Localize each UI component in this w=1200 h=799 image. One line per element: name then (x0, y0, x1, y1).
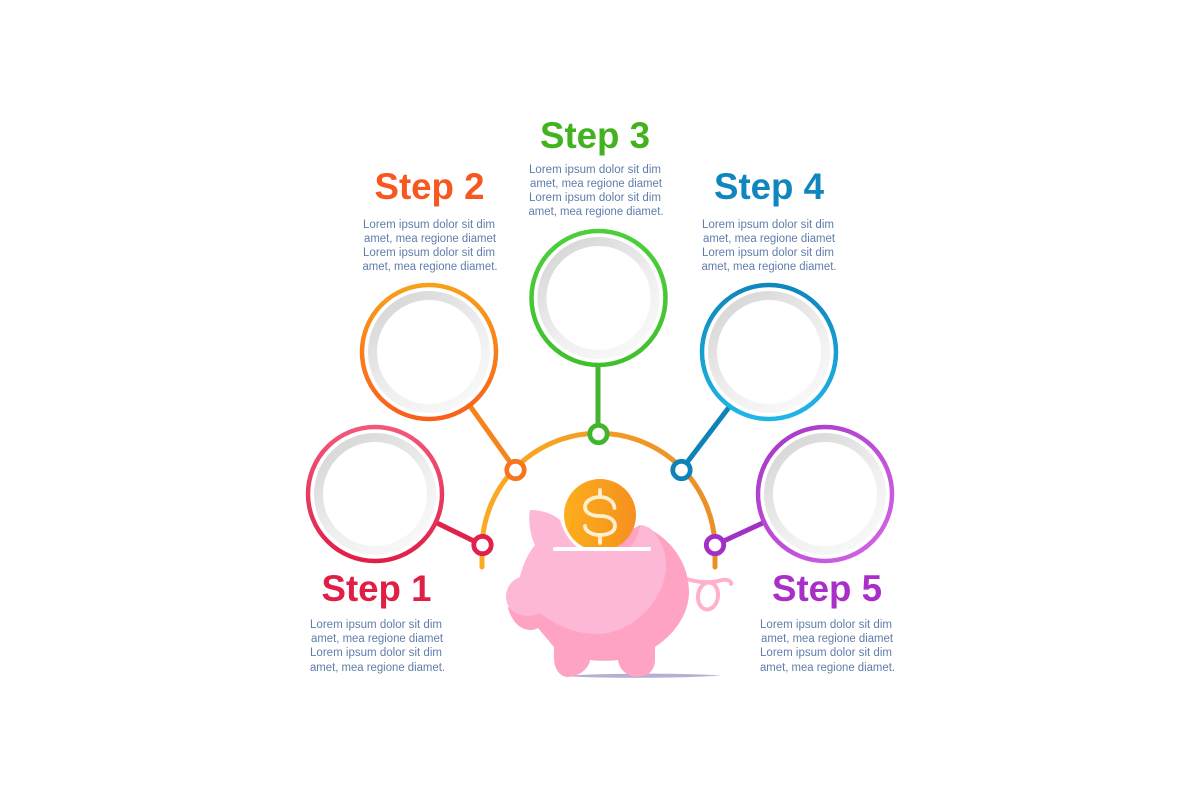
panel: step 1 (308, 427, 491, 674)
text block: step 3: Lorem ipsum dolor sit dim (529, 164, 661, 176)
text block: step 3: amet, mea regione diamet. (528, 206, 664, 218)
connector arc (482, 433, 715, 567)
connector: step 2 (470, 406, 524, 479)
text block: step 1: Lorem ipsum dolor sit dim (310, 619, 442, 631)
text block: step 2: Lorem ipsum dolor sit dim (363, 219, 495, 231)
ring: step 4 (702, 285, 836, 419)
heading: step 1: Step 1 (322, 568, 432, 609)
text block: step 4: amet, mea regione diamet (703, 233, 836, 245)
pig highlight and ear (506, 510, 666, 634)
text block: step 5: amet, mea regione diamet (761, 633, 894, 645)
text block: step 3 (528, 164, 664, 218)
coin (564, 479, 636, 551)
heading: step 3: Step 3 (540, 115, 650, 156)
coin dollar sign (585, 490, 615, 543)
panel: step 5 (706, 427, 895, 674)
text block: step 1: amet, mea regione diamet. (310, 662, 445, 674)
icon: piggy bank with coin (506, 479, 731, 678)
pig shadow (563, 674, 721, 678)
heading: step 4: Step 4 (714, 166, 824, 207)
connector: step 3 (590, 364, 607, 443)
text block: step 4: Lorem ipsum dolor sit dim (702, 219, 834, 231)
text block: step 1: Lorem ipsum dolor sit dim (310, 647, 442, 659)
text block: step 4: amet, mea regione diamet. (702, 261, 836, 273)
ring: step 5 (758, 427, 892, 561)
text block: step 4 (702, 219, 836, 273)
pig body (508, 525, 689, 677)
text block: step 2: Lorem ipsum dolor sit dim (363, 247, 495, 259)
text block: step 4: Lorem ipsum dolor sit dim (702, 247, 834, 259)
text block: step 5: Lorem ipsum dolor sit dim (760, 647, 892, 659)
pig tail (687, 579, 731, 611)
connector: step 1 (437, 523, 491, 554)
text block: step 2: amet, mea regione diamet. (362, 261, 498, 273)
text block: step 2: amet, mea regione diamet (364, 233, 497, 245)
connector: step 4 (673, 406, 730, 479)
text block: step 5: amet, mea regione diamet. (760, 662, 895, 674)
heading: step 2: Step 2 (374, 166, 484, 207)
heading: step 5: Step 5 (772, 568, 882, 609)
connector: step 5 (706, 522, 765, 554)
text block: step 3: amet, mea regione diamet (530, 178, 663, 190)
panel: step 3 (528, 115, 666, 443)
text block: step 5 (760, 619, 895, 674)
coin slot (553, 547, 651, 551)
ring: step 1 (308, 427, 442, 561)
panel: step 4 (673, 166, 836, 479)
text block: step 5: Lorem ipsum dolor sit dim (760, 619, 892, 631)
text block: step 3: Lorem ipsum dolor sit dim (529, 192, 661, 204)
text block: step 2 (362, 219, 498, 273)
panel: step 2 (362, 166, 524, 479)
ring: step 2 (362, 285, 496, 419)
ring: step 3 (532, 231, 666, 365)
text block: step 1: amet, mea regione diamet (311, 633, 444, 645)
text block: step 1 (310, 619, 445, 674)
